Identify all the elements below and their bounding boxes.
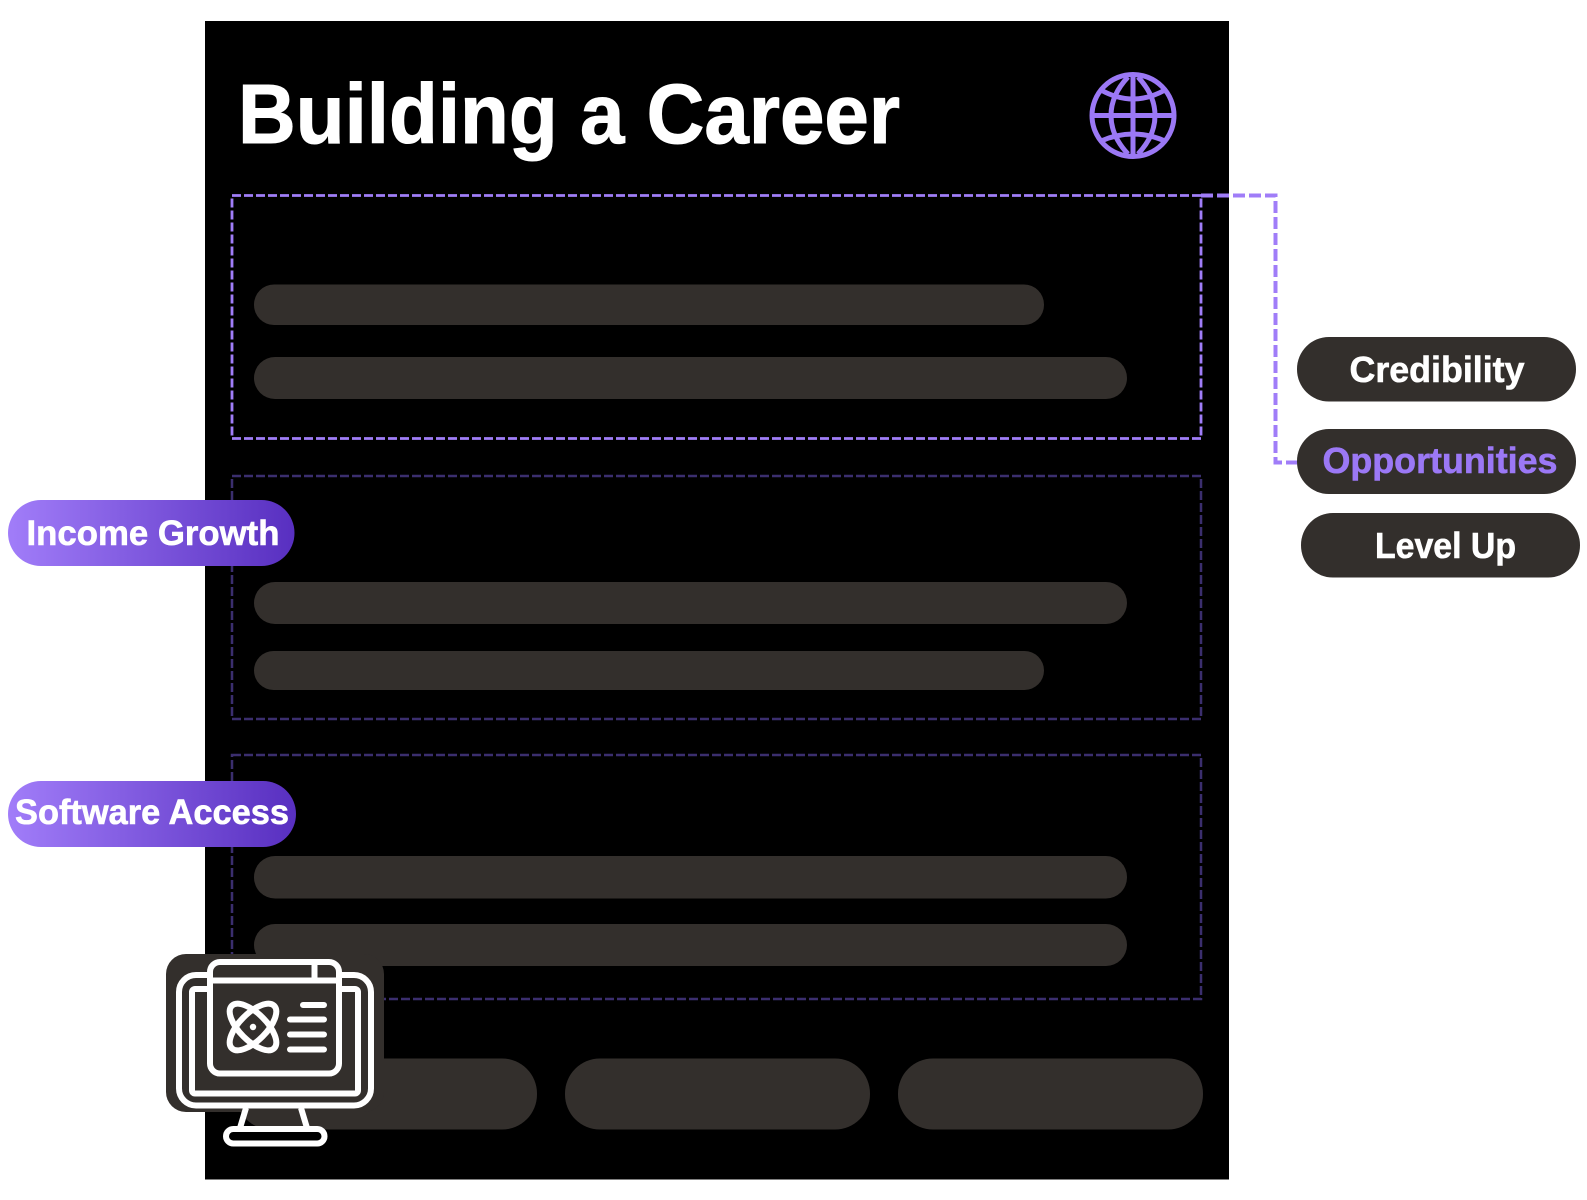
tag: Income Growth: Income Growth <box>26 514 280 553</box>
bottom pill 3 <box>898 1058 1203 1130</box>
text placeholder bar 4 <box>254 651 1044 690</box>
text placeholder bar 6 <box>254 924 1127 966</box>
connector: dashed line to Opportunities <box>1201 196 1297 462</box>
title: Building a Career <box>238 67 900 161</box>
panel: section three <box>232 755 1201 999</box>
text placeholder bar 3 <box>254 582 1127 624</box>
tag: Level Up <box>1301 513 1580 578</box>
text placeholder bar 5 <box>254 856 1127 898</box>
bottom pill 1 <box>236 1058 537 1130</box>
tag: Credibility <box>1297 337 1576 402</box>
panel: section two <box>232 476 1201 719</box>
panel: highlighted section one <box>232 196 1201 438</box>
tag: Credibility: Credibility <box>1350 349 1524 390</box>
tag: Opportunities <box>1297 429 1576 494</box>
icon: globe <box>1092 74 1174 157</box>
icon: computer with atom window <box>166 954 384 1144</box>
text placeholder bar 1 <box>254 284 1044 325</box>
tag: Income Growth <box>8 500 294 566</box>
panel: black card <box>205 21 1229 1180</box>
text placeholder bar 2 <box>254 357 1127 399</box>
tag: Opportunities: Opportunities <box>1322 440 1558 481</box>
tag: Software Access: Software Access <box>15 793 289 832</box>
tag: Software Access <box>8 781 296 847</box>
bottom pill 2 <box>565 1058 870 1130</box>
tag: Level Up: Level Up <box>1375 525 1516 566</box>
